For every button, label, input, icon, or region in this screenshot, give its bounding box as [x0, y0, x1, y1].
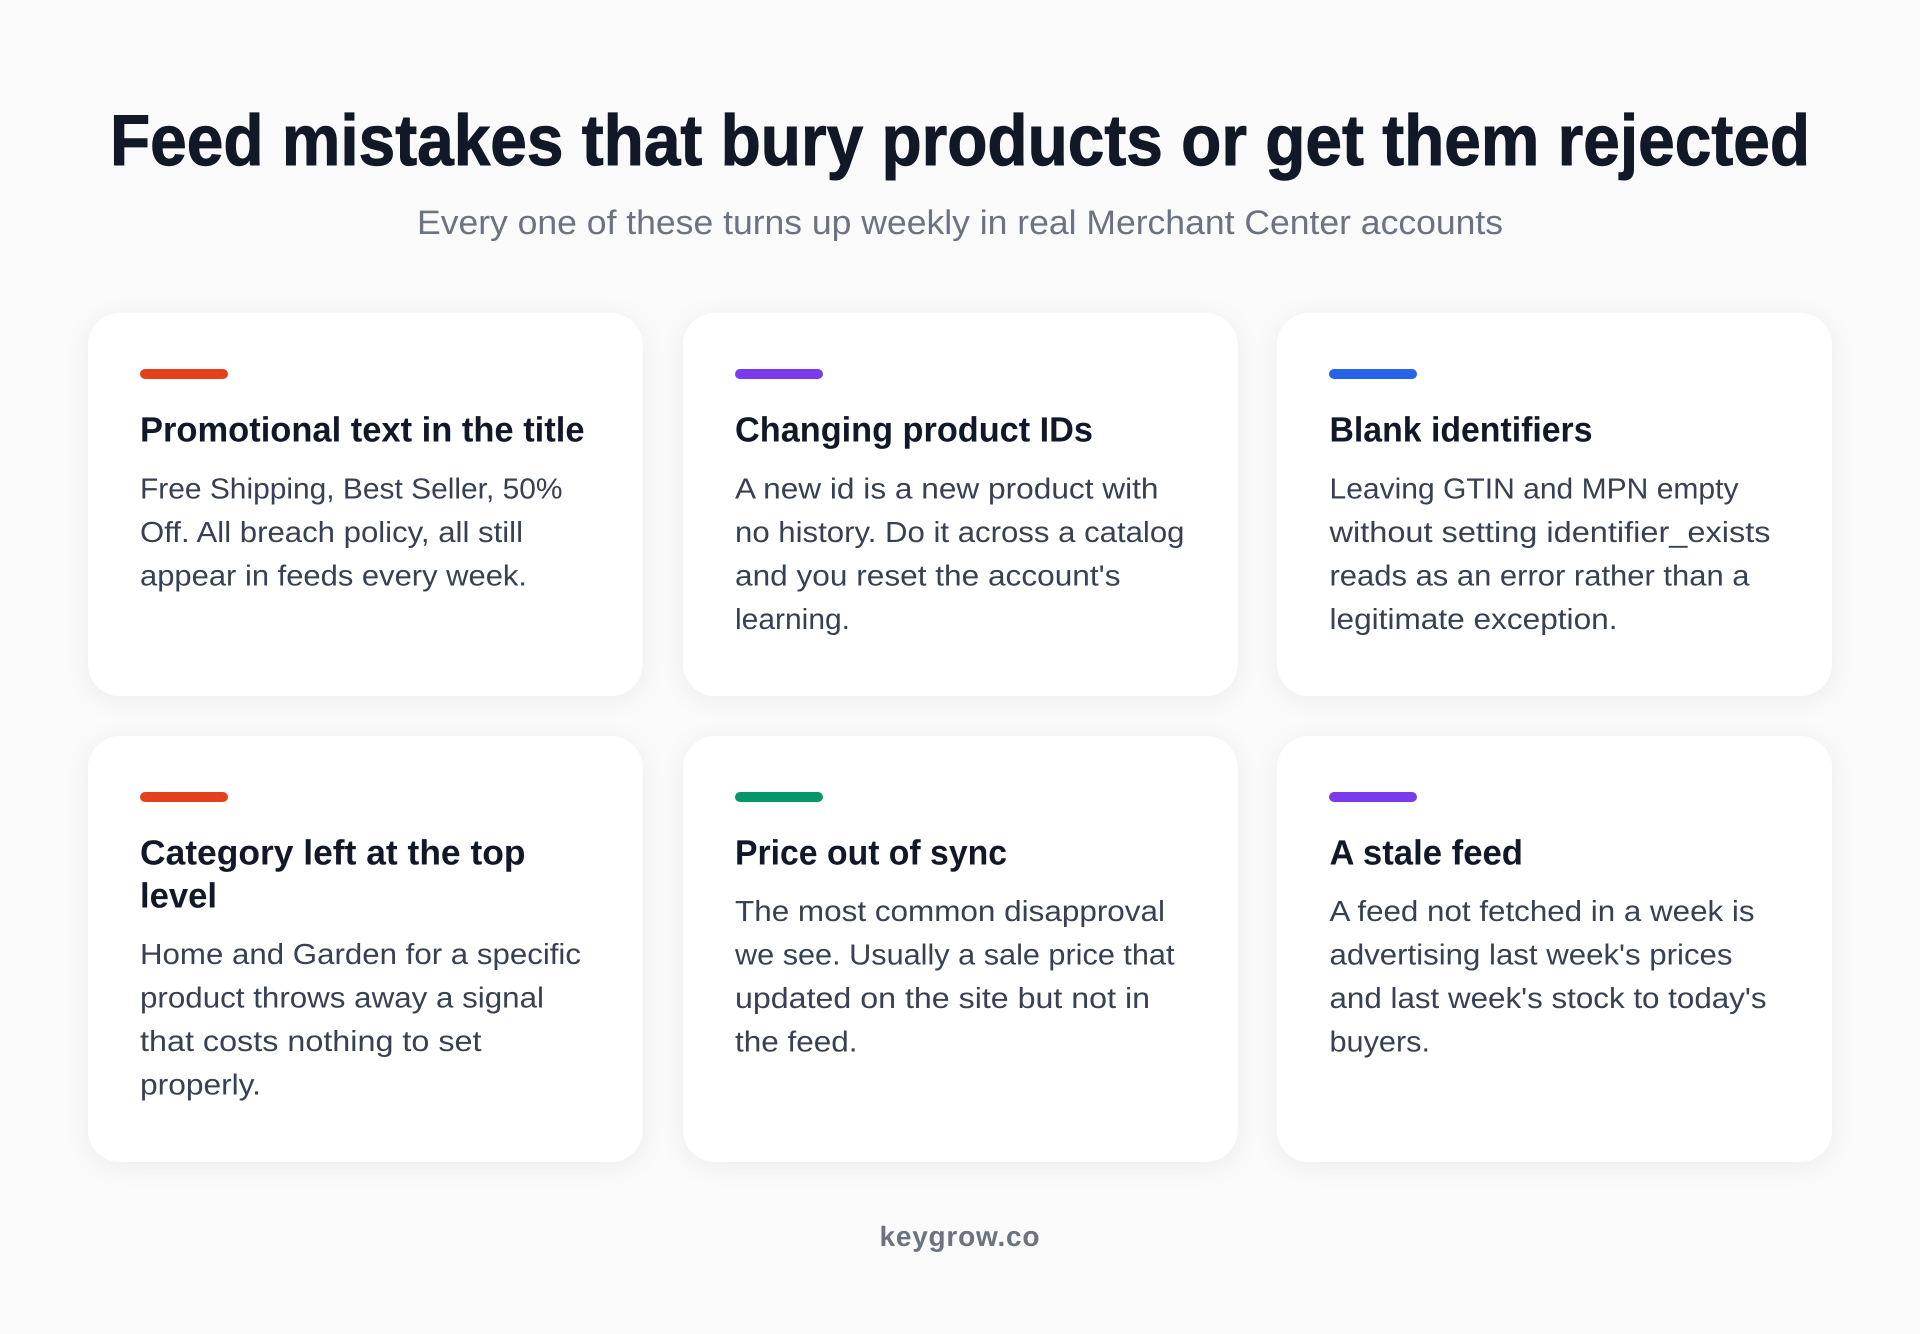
text block: category: properly. [140, 1070, 261, 1102]
heading: category left at the top level [140, 834, 526, 916]
panel: blank identifiers [1277, 313, 1832, 696]
title: Feed mistakes that bury products or get them rejected [110, 101, 1810, 181]
text block: blank identifiers: Leaving GTIN and MPN empty [1330, 474, 1739, 506]
text block: a stale feed: buyers. [1330, 1026, 1430, 1058]
text block: price out of sync: The most common disapproval [735, 896, 1165, 928]
text block: category: product throws away a signal [140, 982, 544, 1014]
text block: category [140, 939, 581, 1102]
text block: blank identifiers: without setting identifier_exists [1328, 517, 1770, 549]
text block: promotional text: Off. All breach policy, all still [140, 517, 523, 549]
heading: a stale feed: A stale feed [1330, 834, 1523, 872]
text block: category: that costs nothing to set [140, 1026, 482, 1058]
panel: changing product IDs [683, 313, 1238, 696]
text block: blank identifiers: legitimate exception. [1330, 604, 1618, 636]
text block: changing product IDs: learning. [735, 604, 850, 636]
text block: a stale feed [1330, 896, 1766, 1058]
text block: a stale feed: advertising last week's prices [1330, 940, 1732, 972]
text block: a stale feed: and last week's stock to today's [1330, 983, 1766, 1015]
text block: blank identifiers [1328, 474, 1770, 636]
text block: price out of sync [734, 896, 1174, 1058]
heading: price out of sync: Price out of sync [735, 834, 1007, 872]
text block: promotional text: appear in feeds every week. [140, 560, 527, 592]
panel: price out of sync [683, 736, 1238, 1162]
subtitle: Every one of these turns up weekly in real Merchant Center accounts [417, 204, 1503, 242]
text block: changing product IDs: and you reset the account's [735, 560, 1120, 592]
heading: promotional text: Promotional text in the title [140, 410, 584, 450]
heading: blank identifiers: Blank identifiers [1330, 410, 1592, 450]
footer: brand: keygrow.co [880, 1221, 1040, 1252]
panel: promotional text in the title [88, 313, 643, 696]
text block: price out of sync: we see. Usually a sale price that [734, 940, 1174, 972]
text block: category: Home and Garden for a specific [140, 939, 581, 971]
heading: changing product IDs: Changing product IDs [735, 410, 1093, 450]
text block: changing product IDs: no history. Do it across a catalog [735, 517, 1184, 549]
heading: category left at the top level: level [140, 876, 217, 916]
text block: blank identifiers: reads as an error rather than a [1330, 560, 1750, 592]
text block: promotional text: Free Shipping, Best Seller, 50% [140, 474, 562, 506]
text block: a stale feed: A feed not fetched in a week is [1330, 896, 1754, 928]
text block: promotional text [140, 474, 562, 592]
text block: changing product IDs: A new id is a new product with [735, 474, 1158, 506]
text block: price out of sync: updated on the site but not in [735, 983, 1150, 1015]
text block: changing product IDs [735, 474, 1184, 636]
text block: price out of sync: the feed. [735, 1026, 858, 1058]
heading: category left at the top level: Category left at the top [140, 834, 526, 872]
panel: a stale feed [1277, 736, 1832, 1162]
panel: category left at the top level [88, 736, 643, 1162]
